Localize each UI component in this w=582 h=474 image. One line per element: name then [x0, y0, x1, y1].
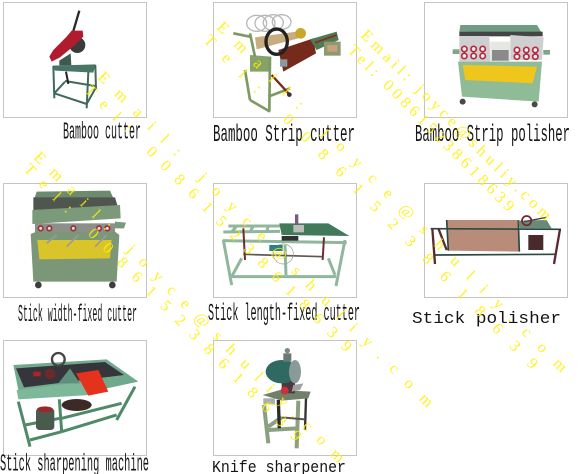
panel: Stick sharpening machine: [0, 340, 149, 474]
icon: bamboo cutter machine: [49, 11, 96, 108]
watermark: contact details: Email: joyce@shuliy.com: [357, 27, 555, 224]
icon: length-fixed cutter machine: [223, 214, 349, 286]
panel: Bamboo cutter: [4, 2, 146, 146]
label: Bamboo cutter: [63, 120, 141, 146]
infographic canvas: Stick width-fixed cutter: [18, 302, 137, 329]
panel: Bamboo Strip cutter: [213, 2, 356, 149]
watermark: contact details: Email: joyce@shuliy.com: [94, 69, 437, 411]
watermark: contact details: Tel: 008615238618639: [20, 161, 304, 445]
icon: strip polisher machine: [453, 25, 550, 107]
panel: Stick polisher: [412, 184, 568, 329]
label: Stick length-fixed cutter: [208, 301, 360, 328]
icon: knife sharpener machine: [263, 348, 311, 448]
panel: Stick length-fixed cutter: [208, 184, 360, 328]
watermark: contact details: Tel: 008615238618639: [81, 82, 355, 355]
icon: width-fixed cutter machine: [31, 191, 126, 288]
icon: stick sharpening machine: [13, 353, 138, 447]
watermark: contact details: Email: joyce@shuliy.com: [30, 149, 348, 467]
panel: Knife sharpener: [212, 340, 356, 474]
watermark: contact details: Tel: 008615238618639: [344, 42, 517, 215]
watermark: contact details: Email: joyce@shuliy.com: [213, 19, 571, 376]
panel: Stick width-fixed cutter: [4, 184, 146, 329]
label: Stick polisher: [412, 310, 561, 329]
label: Bamboo Strip cutter: [213, 122, 355, 149]
icon: stick polisher machine: [431, 216, 561, 264]
panel: Bamboo Strip polisher: [415, 2, 570, 149]
icon: bamboo strip cutter machine: [233, 15, 341, 112]
watermark: contact details: Tel: 008615238618639: [200, 32, 541, 373]
